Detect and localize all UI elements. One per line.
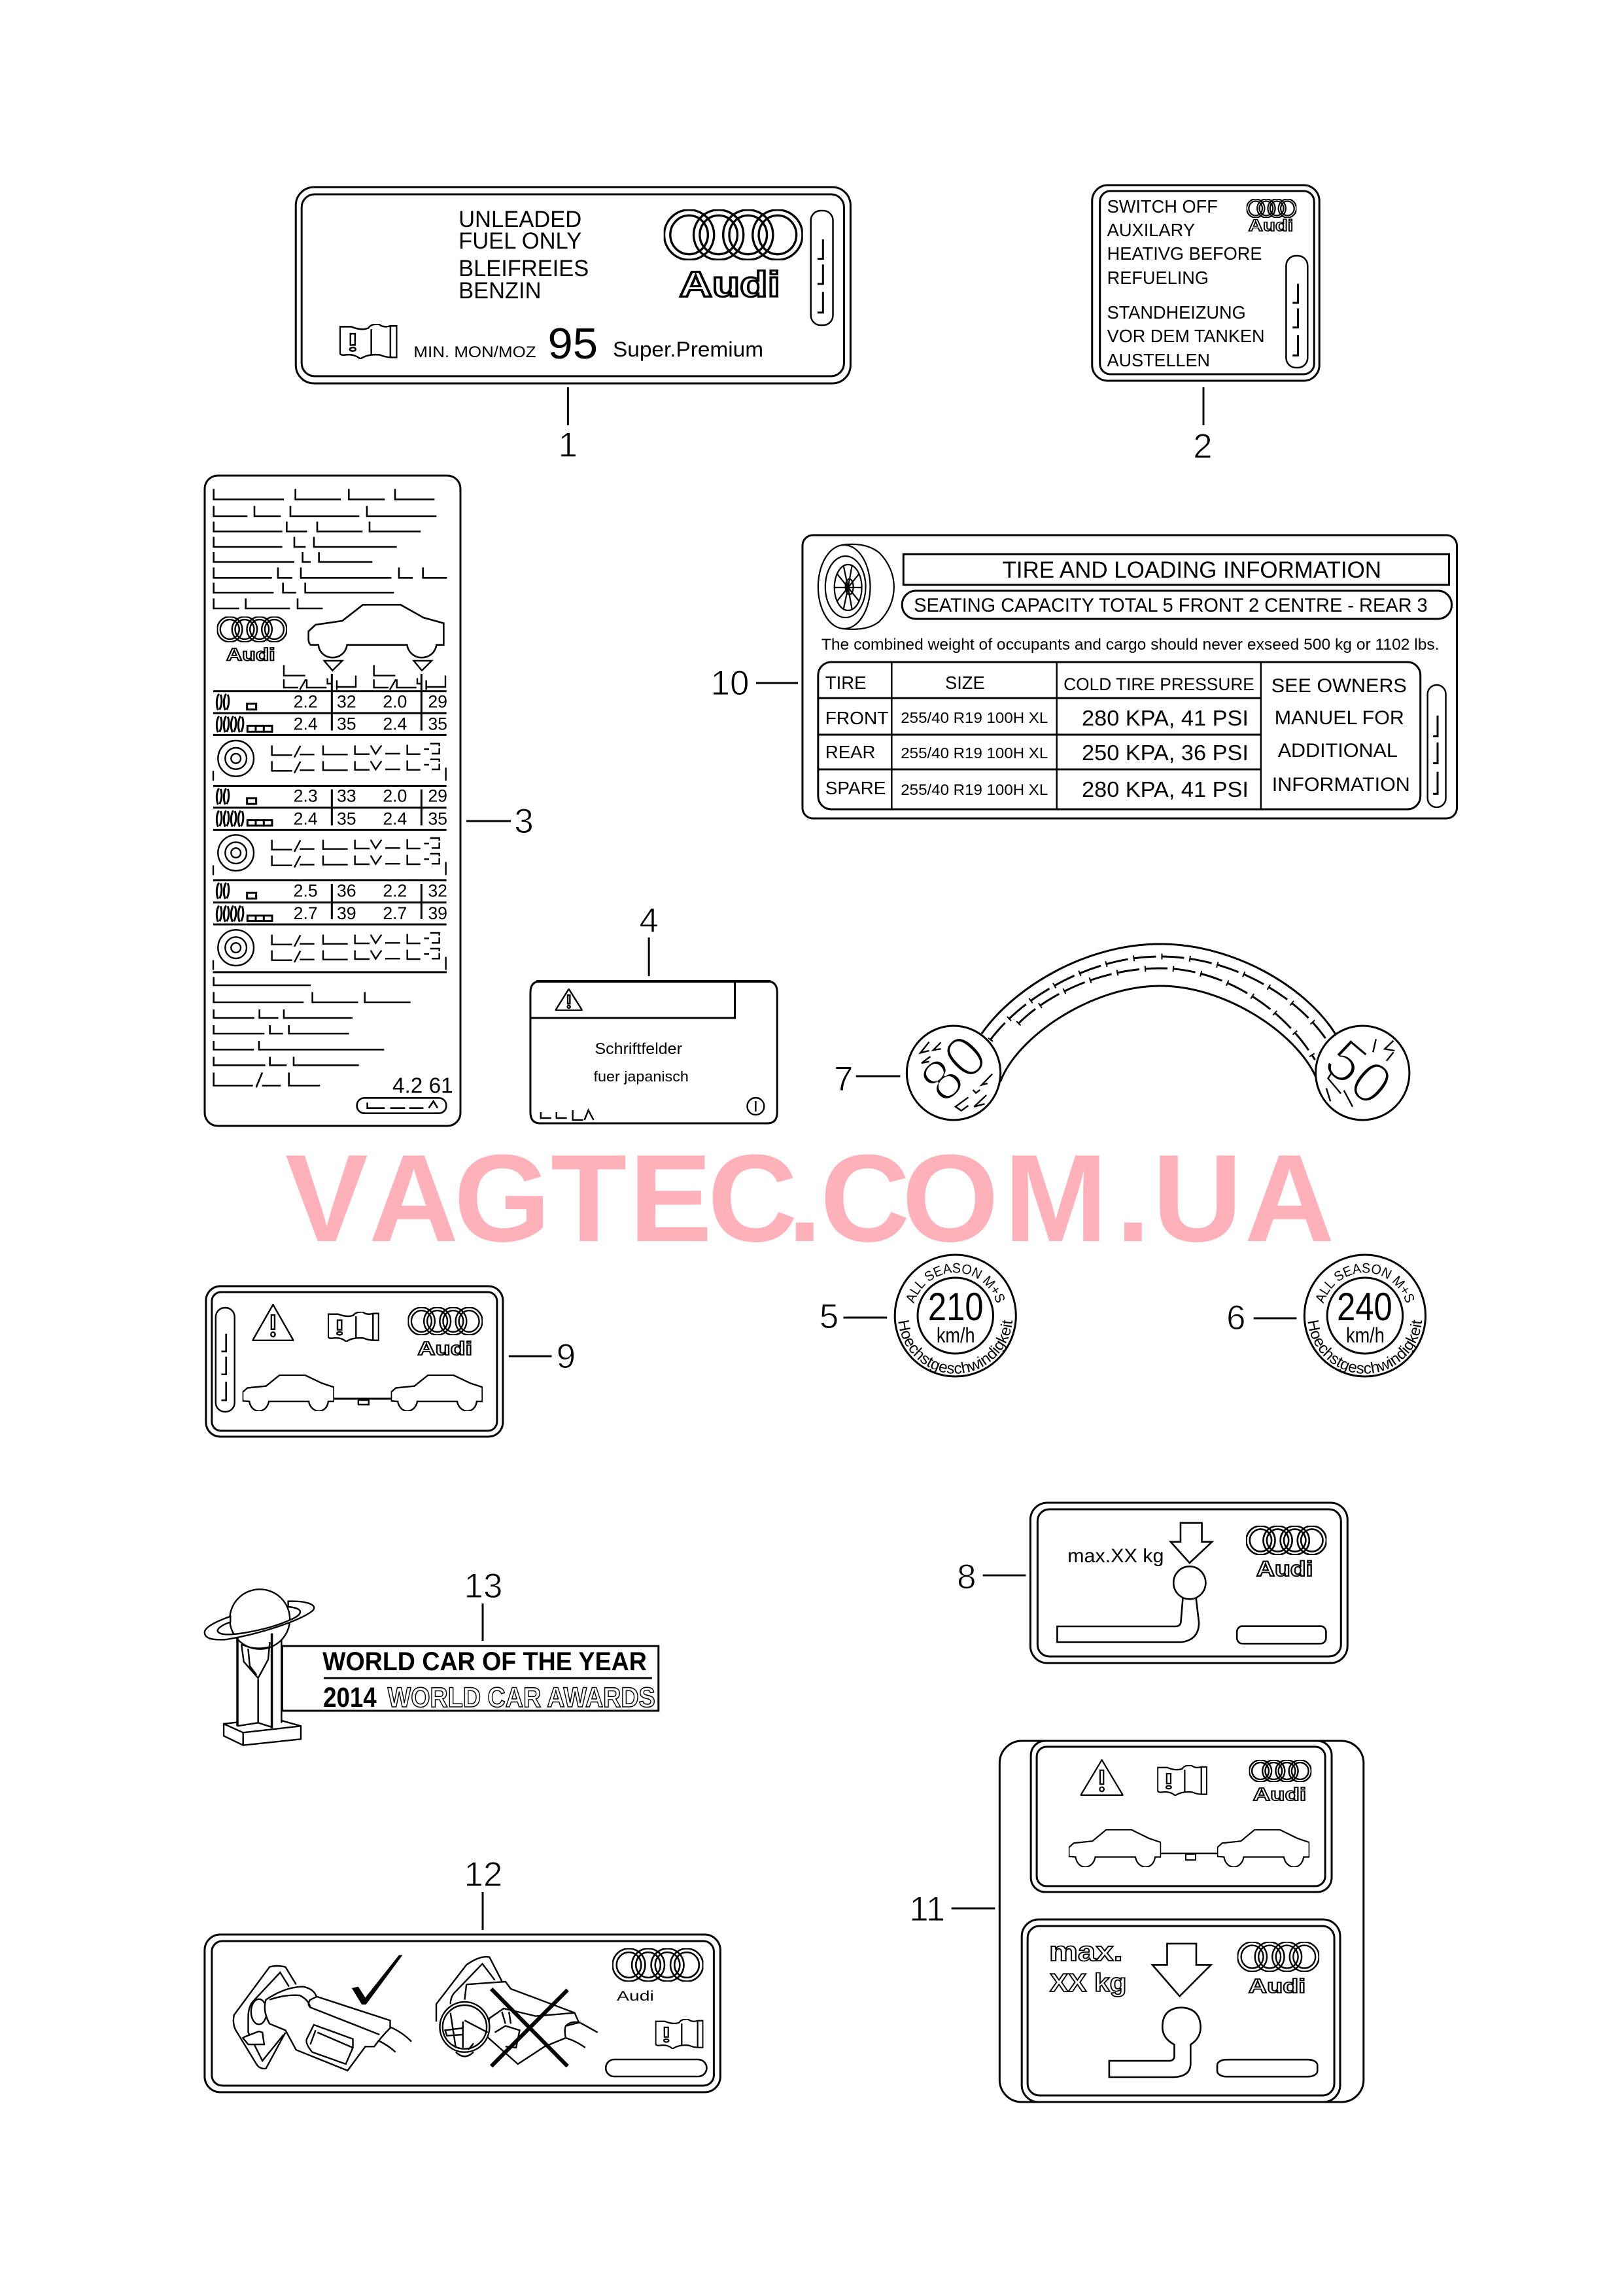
heating text: AUXILARY: [1107, 220, 1195, 240]
sub-label: max load: [1022, 1919, 1340, 2102]
panel: label 11 combined sheet: [999, 1741, 1364, 2102]
award box: WORLD CAR OF THE YEAR: [322, 1647, 647, 1676]
icon: info circle: [747, 1098, 764, 1115]
placeholder text: fuer japanisch: [594, 1068, 689, 1085]
callout 10: [711, 664, 798, 703]
callout 4: 4: [639, 902, 659, 940]
version number: 4.2 61: [392, 1074, 453, 1098]
slot: [1286, 256, 1307, 368]
icon: book: [328, 1312, 379, 1342]
panel: label 4 warning: [530, 981, 777, 1123]
icon: Audi logo: [408, 1307, 483, 1359]
callout 11: 11: [909, 1890, 945, 1929]
heating text: VOR DEM TANKEN: [1107, 326, 1265, 346]
tire table: 255/40 R19 100H XL: [901, 781, 1048, 798]
panel: label 8 max load: [1030, 1503, 1347, 1663]
sub-label: max load: max.: [1049, 1936, 1122, 1967]
pressure values: 32: [337, 692, 356, 712]
icon: tire: [818, 544, 894, 629]
callout 1: [559, 387, 578, 464]
icon: wrong nozzle: [436, 1957, 598, 2064]
pressure values: 2.0: [383, 692, 407, 712]
pressure values: 35: [428, 809, 447, 828]
icon: Audi logo: Audi: [1249, 217, 1293, 235]
callout 11: [909, 1890, 995, 1929]
icon: Audi logo: Audi: [680, 264, 780, 304]
icon: Audi logo: Audi: [226, 644, 275, 664]
callout 1: 1: [559, 426, 578, 464]
tire table: [818, 662, 1421, 809]
placeholder text: [594, 1040, 689, 1085]
placeholder text: Schriftfelder: [595, 1040, 682, 1058]
icon: book: [340, 324, 397, 359]
table rules: [213, 674, 447, 972]
callout 10: 10: [711, 664, 749, 703]
arch band: [982, 944, 1335, 1081]
panel: speed sticker 240: [1303, 1253, 1426, 1378]
icon: Audi logo: Audi: [1256, 1557, 1313, 1581]
sub-label: max load: XX kg: [1050, 1969, 1126, 1997]
title: TIRE AND LOADING INFORMATION: [1003, 557, 1381, 583]
icon: car outline: [309, 604, 443, 657]
callout 3: [466, 802, 534, 841]
tire table: FRONT: [825, 708, 888, 728]
callout 9: 9: [557, 1337, 576, 1376]
tire table: 250 KPA, 36 PSI: [1082, 741, 1249, 765]
panel: speed sticker 210: [893, 1253, 1017, 1378]
pressure values: 2.0: [383, 786, 407, 806]
placeholder text rows bottom: [214, 977, 411, 1087]
callout 9: [509, 1337, 576, 1376]
slot: [216, 1308, 235, 1412]
tire table: 280 KPA, 41 PSI: [1082, 706, 1249, 730]
tire table: ADDITIONAL: [1278, 740, 1398, 762]
left disc 80: 80: [908, 1023, 1000, 1115]
panel: speed sticker 210: km/h: [937, 1323, 975, 1347]
callout 5: 5: [820, 1297, 838, 1336]
panel: label 1 unleaded fuel: [296, 187, 850, 383]
fuel text: UNLEADED: [458, 207, 581, 232]
panel: speed sticker 240: ALL SEASON M+S: [1316, 1263, 1414, 1304]
pressure values: 35: [337, 809, 356, 828]
icon: wheel rows: [213, 741, 446, 970]
part marks: [541, 1110, 594, 1120]
seating capacity pill: SEATING CAPACITY TOTAL 5 FRONT 2 CENTRE - REAR 3: [914, 595, 1428, 616]
callout 2: [1193, 387, 1213, 466]
callout 4: [639, 902, 659, 976]
title: [903, 554, 1449, 585]
callout 8: [957, 1558, 1026, 1596]
load text: max.XX kg: [1067, 1545, 1164, 1567]
panel: speed sticker 240: Hoechstgeschwindigkeit: [1308, 1320, 1422, 1374]
icon: correct nozzle: [233, 1966, 411, 2071]
icon: trophy: [205, 1589, 314, 1745]
slot: [811, 211, 833, 325]
octane text: Super.Premium: [613, 338, 763, 361]
pressure values: 39: [428, 903, 447, 923]
icon: check mark: [352, 1955, 402, 2005]
icon: Audi logo: Audi: [617, 1989, 654, 2004]
icon: Audi logo: [664, 210, 803, 304]
pressure values: 2.5: [294, 881, 318, 901]
octane text: [413, 319, 763, 368]
callout 5: [820, 1297, 887, 1336]
pressure values: 2.4: [383, 809, 407, 828]
heating text: STANDHEIZUNG: [1107, 302, 1246, 323]
octane text: MIN. MON/MOZ: [413, 343, 536, 361]
fuel text: FUEL ONLY: [458, 228, 581, 254]
tire table: 280 KPA, 41 PSI: [1082, 777, 1249, 801]
icon: warning triangle: [555, 989, 582, 1010]
pressure values: 39: [337, 903, 356, 923]
panel: label 3 tyre pressure table: [205, 476, 460, 1126]
tire table: SEE OWNERS: [1271, 675, 1407, 697]
pressure values: 35: [428, 714, 447, 734]
tire table: SPARE: [825, 778, 886, 798]
tire table: MANUEL FOR: [1275, 707, 1404, 729]
part number pill: [357, 1098, 446, 1113]
icon: Audi logo: Audi: [417, 1339, 472, 1359]
pressure values: 33: [337, 786, 356, 806]
pressure values: 2.4: [383, 714, 407, 734]
panel: label 12 fuel nozzle: [205, 1935, 720, 2092]
callout 13: [464, 1567, 502, 1641]
icon: cross: [491, 1989, 568, 2066]
pressure values: [294, 692, 447, 923]
sub-label: max load: Audi: [1249, 1974, 1305, 1997]
callout 12: 12: [464, 1855, 502, 1894]
pressure values: 36: [337, 881, 356, 901]
tire table: TIRE: [825, 673, 867, 693]
panel: label 10 tire and loading information: [803, 535, 1457, 818]
heating text: AUSTELLEN: [1107, 350, 1210, 370]
placeholder text rows top: [214, 489, 447, 608]
right disc 50: 50: [1313, 1026, 1404, 1119]
slot: [1428, 685, 1446, 807]
icon: Audi logo: [613, 1949, 703, 2004]
panel: speed sticker 210: ALL SEASON M+S: [907, 1263, 1005, 1304]
pressure values: 2.7: [294, 903, 318, 923]
fuel text: BLEIFREIES: [458, 256, 589, 281]
callout 6: 6: [1226, 1299, 1245, 1337]
callout 2: 2: [1193, 427, 1213, 466]
pressure values: 32: [428, 881, 447, 901]
pressure values: 2.2: [294, 692, 318, 712]
tire table: 255/40 R19 100H XL: [901, 745, 1048, 762]
icon: Audi logo: [1246, 1526, 1326, 1581]
heating text: HEATIVG BEFORE: [1107, 243, 1262, 264]
pressure values: 29: [428, 786, 447, 806]
callout 3: 3: [514, 802, 534, 841]
icon: load symbols: [216, 694, 272, 922]
callout 6: [1226, 1299, 1296, 1337]
icon: book: [656, 2019, 703, 2049]
panel: label 13 world car of the year: [205, 1589, 659, 1745]
tire table: SIZE: [945, 673, 985, 693]
callout 7: 7: [834, 1060, 853, 1098]
panel: speed sticker 240: km/h: [1346, 1323, 1385, 1347]
fuel text: [458, 207, 589, 304]
award box: 2014: [323, 1682, 377, 1713]
panel: speed sticker 210: Hoechstgeschwindigkeit: [898, 1320, 1012, 1374]
panel: label 2 auxiliary heating: [1092, 185, 1319, 381]
fuel text: BENZIN: [458, 278, 542, 304]
part number pill: [606, 2059, 706, 2076]
panel: label 9 towing warning: [206, 1286, 503, 1437]
tire table: COLD TIRE PRESSURE: [1063, 674, 1254, 694]
pressure values: 2.2: [383, 881, 407, 901]
watermark: VAGTEC.COM.UA: [285, 1129, 1334, 1268]
callout 13: 13: [464, 1567, 502, 1605]
tire table: 255/40 R19 100H XL: [901, 709, 1048, 726]
icon: towing cars: [243, 1375, 483, 1411]
pressure values: 2.3: [294, 786, 318, 806]
pressure values: 2.4: [294, 809, 318, 828]
callout 7: [834, 1060, 900, 1098]
heating text: REFUELING: [1107, 268, 1209, 288]
sub-label: towing warning: [1031, 1741, 1332, 1892]
tire table: INFORMATION: [1272, 774, 1410, 796]
tire table: REAR: [825, 742, 875, 762]
heating text: SWITCH OFF: [1107, 196, 1218, 217]
icon: Audi logo: [1247, 199, 1296, 235]
pressure values: 2.4: [294, 714, 318, 734]
axle markers: [284, 661, 445, 690]
icon: warning triangle: [252, 1305, 294, 1340]
octane text: 95: [547, 319, 598, 368]
pressure values: 2.7: [383, 903, 407, 923]
panel: speed sticker 210: 210: [928, 1285, 984, 1329]
sub-label: towing warning: Audi: [1253, 1784, 1306, 1804]
pressure values: 35: [337, 714, 356, 734]
panel: speed sticker 240: 240: [1337, 1285, 1392, 1329]
callout 8: 8: [957, 1558, 976, 1596]
icon: Audi logo: [217, 617, 287, 664]
heating text: [1107, 196, 1265, 370]
award box: WORLD CAR AWARDS: [388, 1682, 655, 1713]
pressure values: 29: [428, 692, 447, 712]
icon: arrow and tow ball: [1057, 1523, 1326, 1643]
weight note: The combined weight of occupants and cargo should never exseed 500 kg or 1102 lbs.: [821, 636, 1440, 654]
callout 12: [464, 1855, 502, 1930]
award box: [282, 1646, 659, 1713]
panel: label 7 arch sticker: [907, 944, 1409, 1120]
